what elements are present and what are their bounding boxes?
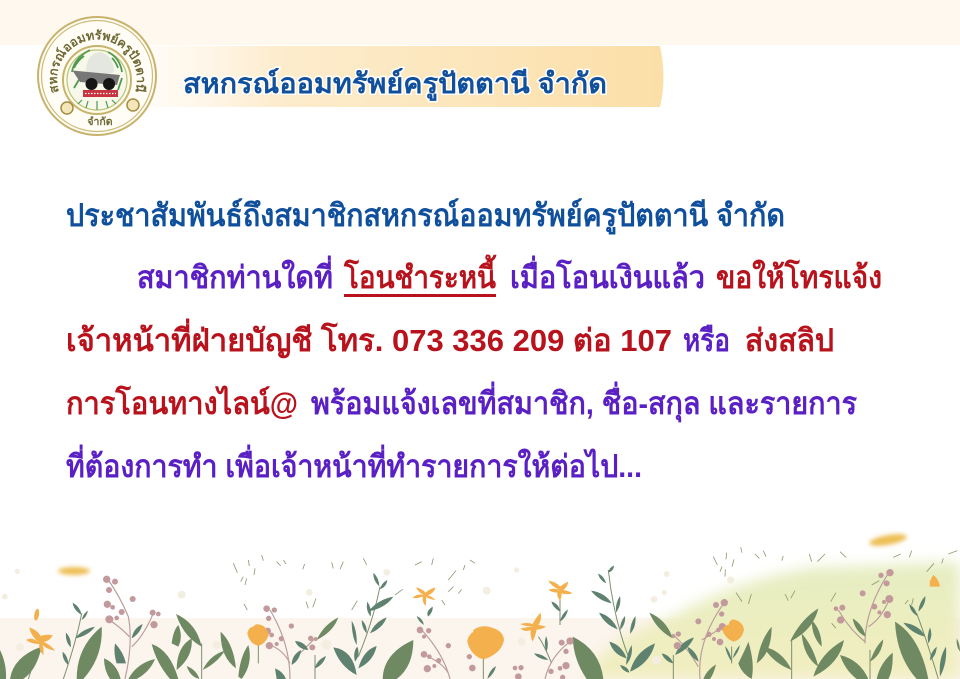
- logo: สหกรณ์ออมทรัพย์ครูปัตตานี: [50, 29, 147, 93]
- logo: [37, 16, 157, 136]
- line 4: พร้อมแจ้งเลขที่สมาชิก, ชื่อ-สกุล และรายการ: [311, 381, 857, 423]
- line 5: ที่ต้องการทำ เพื่อเจ้าหน้าที่ทำรายการให้ต่อไป...: [66, 444, 642, 484]
- pink berry stems: [545, 573, 888, 679]
- line 3: ส่งสลิป: [745, 323, 834, 358]
- line 2: เมื่อโอนเงินแล้ว: [510, 255, 705, 295]
- line 2: โอนชำระหนี้: [343, 254, 497, 295]
- bottom cream ground: [0, 618, 960, 679]
- floating petals: [58, 532, 908, 575]
- green hill: [585, 562, 960, 679]
- left meadow plants: [0, 555, 480, 679]
- orange flowers: [472, 575, 940, 659]
- grass ticks: [713, 547, 957, 628]
- line 4: การโอนทางไลน์@: [66, 385, 298, 421]
- stems: [28, 587, 380, 679]
- pale dandelions: [483, 567, 734, 665]
- grass ticks: [233, 555, 475, 610]
- leaves: [573, 608, 960, 679]
- line 2: สมาชิกท่านใดที่: [137, 255, 333, 295]
- pale dandelions: [2, 569, 390, 651]
- orange flowers: [26, 587, 480, 658]
- logo: จำกัด: [87, 116, 113, 128]
- line 2: [137, 254, 882, 297]
- header banner: [150, 46, 664, 107]
- line 2: ขอให้โทรแจ้ง: [716, 259, 882, 295]
- berries: [103, 576, 476, 672]
- line 3: เจ้าหน้าที่ฝ่ายบัญชี โทร. 073 336 209 ต่อ 107: [66, 318, 672, 359]
- berries: [513, 569, 894, 679]
- line 4: [66, 381, 857, 423]
- stems: [483, 570, 938, 679]
- line 1: ประชาสัมพันธ์ถึงสมาชิกสหกรณ์ออมทรัพย์ครูปัตตานี จำกัด: [66, 198, 785, 235]
- banner title: สหกรณ์ออมทรัพย์ครูปัตตานี จำกัด: [183, 68, 607, 101]
- top cream band: [0, 0, 960, 45]
- announcement text: [66, 198, 882, 484]
- line 3: หรือ: [683, 323, 730, 358]
- pink berry stems: [108, 580, 450, 679]
- leaves: [0, 614, 413, 679]
- line 3: [66, 318, 834, 359]
- right meadow plants: [472, 547, 960, 679]
